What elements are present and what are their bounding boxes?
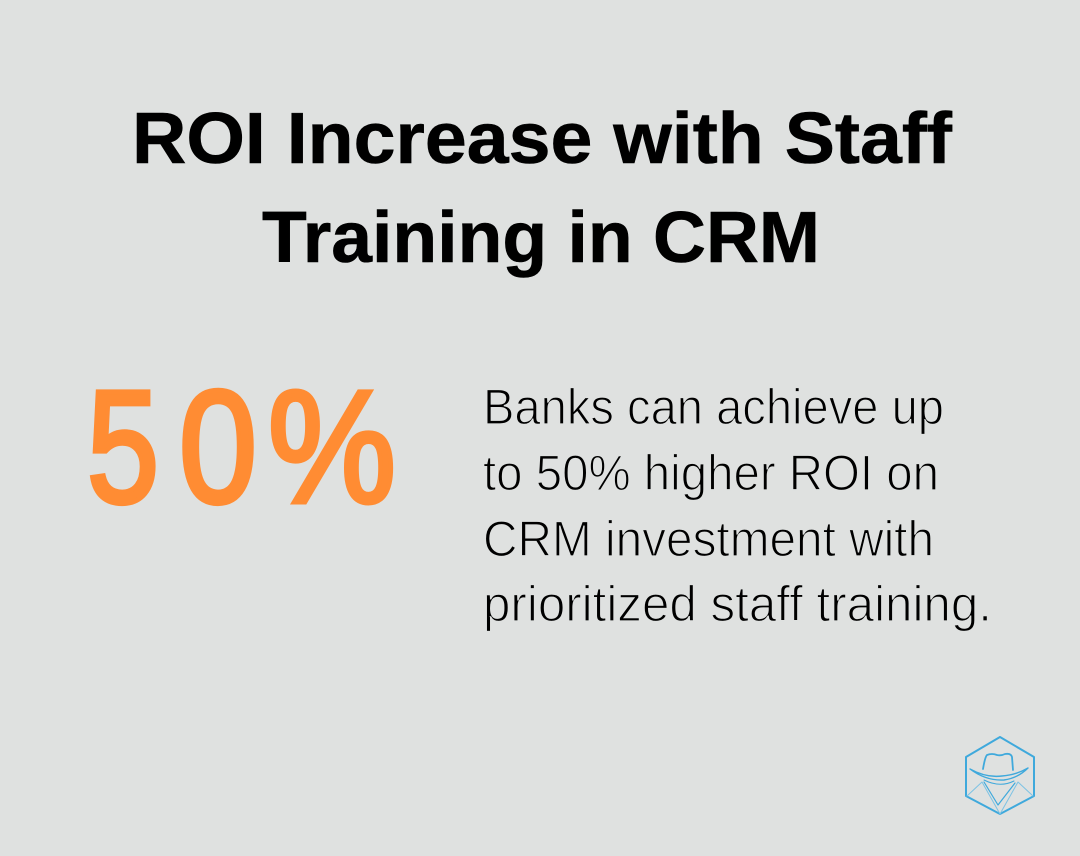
title xyxy=(132,99,953,278)
description text: prioritized staff training. xyxy=(483,576,992,632)
big stat: 50% xyxy=(87,357,396,536)
big stat: 50%: 0 xyxy=(179,357,257,536)
title: Training in CRM xyxy=(262,198,820,278)
big stat: 50%: 5 xyxy=(87,357,159,536)
icon: detective logo in hexagon xyxy=(966,737,1034,814)
description text: to 50% higher ROI on xyxy=(483,445,939,501)
description text: Banks can achieve up xyxy=(483,379,944,435)
title: ROI Increase with Staff xyxy=(132,99,953,179)
description text xyxy=(483,379,992,632)
description text: CRM investment with xyxy=(483,511,934,567)
big stat: 50%: % xyxy=(268,357,396,536)
